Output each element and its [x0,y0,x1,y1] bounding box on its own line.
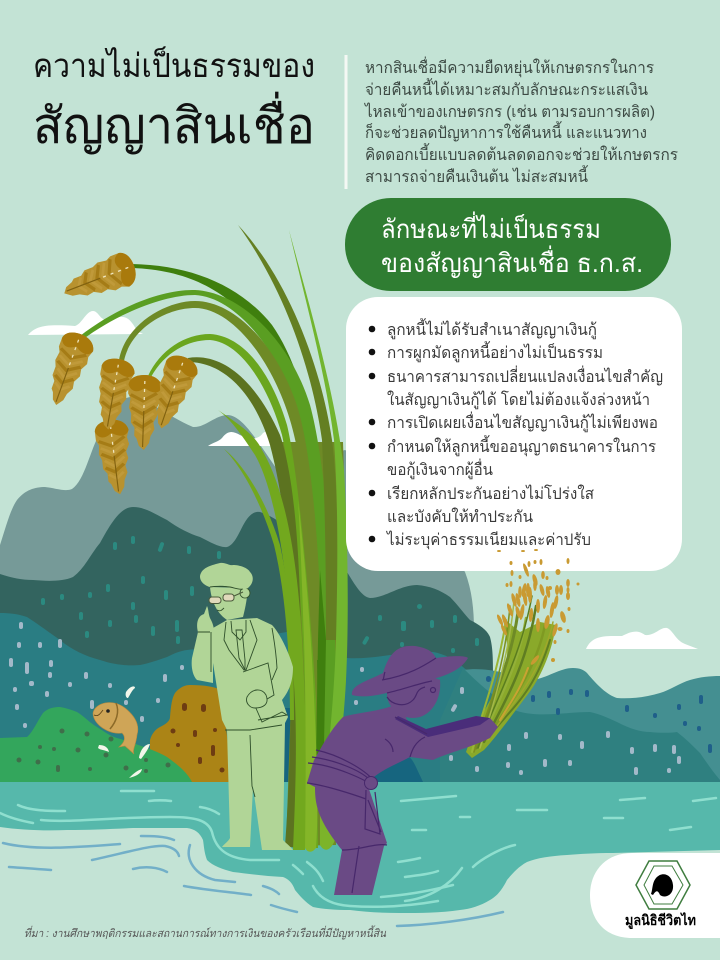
band: dark green [316,570,326,760]
leaf: tall olive [238,225,337,640]
list text: กำหนดให้ลูกหนี้ขออนุญาตธนาคารในการ [387,435,656,457]
mountain: grey back range [0,397,474,700]
rice panicle: lower long [94,418,136,496]
fish [93,686,150,778]
pill heading text: ลักษณะที่ไม่เป็นธรรม [381,211,601,244]
list text: การเปิดเผยเงื่อนไขสัญญาเงินกู้ไม่เพียงพอ [387,411,658,433]
divider [344,55,348,189]
cloud: left [28,311,143,335]
water [0,782,720,913]
logo: Foundation for Thai Life [590,853,720,938]
intro paragraph: คิดดอกเบี้ยแบบลดต้นลดดอกจะช่วยให้เกษตรกร [365,143,678,164]
rice bunch held by farmer [466,549,580,758]
leaf: tall lime [289,230,348,800]
stalk: green second panicle stem [80,290,336,840]
list text [385,318,663,550]
farmer [307,646,498,895]
intro paragraph: จ่ายคืนหนี้ได้เหมาะสมกับลักษณะกระแสเงิน [365,78,648,99]
rice panicle: top [58,250,140,309]
leaf: short lime [224,449,294,720]
list text: เรียกหลักประกันอย่างไม่โปร่งใส [387,484,594,503]
list text: ไม่ระบุค่าธรรมเนียมและค่าปรับ [385,530,591,550]
plant base [276,442,347,846]
list text: และบังคับให้ทำประกัน [387,507,533,526]
mountain: right blue range [463,668,720,782]
band: right base [320,775,338,850]
heading: title [33,46,315,154]
rice panicle: right [145,352,201,434]
mountain: shaded teal patch [283,708,423,782]
water ripples: light [0,791,716,907]
rice panicle: left [40,329,97,411]
rice plant [80,225,348,852]
panel: unfair characteristics list [346,297,682,571]
intro paragraph: สามารถจ่ายคืนเงินต้น ไม่สะสมหนี้ [365,165,588,186]
intro paragraph [363,56,678,186]
pill heading text [381,211,643,278]
cloud: middle [208,432,287,446]
list text: ในสัญญาเงินกู้ได้ โดยไม่ต้องแจ้งล่วงหน้า [387,390,650,410]
panel: green heading pill [345,198,671,291]
list text: ขอกู้เงินจากผู้อื่น [387,458,493,480]
mountain: dark teal range [0,507,493,680]
man in suit [192,563,293,850]
source note: ที่มา : งานศึกษาพฤติกรรมและสถานการณ์ทางการเงินของครัวเรือนที่มีปัญหาหนี้สิน [24,925,386,940]
bullets [369,326,375,542]
list text: ลูกหนี้ไม่ได้รับสำเนาสัญญาเงินกู้ [387,318,597,340]
mountain: right teal foothill [440,668,720,783]
stalk: dark green top panicle stem [132,264,328,745]
intro paragraph: ก็จะช่วยลดปัญหาการใช้คืนหนี้ และแนวทาง [365,121,647,142]
pill heading text: ของสัญญาสินเชื่อ ธ.ก.ส. [381,245,643,278]
water ripples: blue [3,836,503,926]
rice panicle: centre [126,374,163,451]
leaf: lower lime [218,410,306,850]
logo: Foundation for Thai Life: มูลนิธิชีวิตไท [625,911,696,929]
intro paragraph: ไหลเข้าของเกษตรกร (เช่น ตามรอบการผลิต) [363,102,655,121]
heading: title: ความไม่เป็นธรรมของ [33,46,315,84]
stalk: dark olive fifth panicle stem [188,357,304,848]
stalk: lime fourth panicle stem [148,334,318,848]
intro paragraph: หากสินเชื่อมีความยืดหยุ่นให้เกษตรกรในการ [365,56,654,78]
band: bright lime front [298,500,317,852]
speckles on the mountains [9,536,712,775]
list text: ธนาคารสามารถเปลี่ยนแปลงเงื่อนไขสำคัญ [387,365,663,386]
bush: green [0,707,192,782]
rice panicle: middle [91,356,137,432]
mountain: teal middle range [0,613,600,782]
list text: การผูกมัดลูกหนี้อย่างไม่เป็นธรรม [387,341,603,363]
stalk: olive third panicle stem [119,301,322,660]
bush: brown [150,685,232,782]
cloud: right [586,628,698,649]
heading: title: สัญญาสินเชื่อ [33,92,315,154]
